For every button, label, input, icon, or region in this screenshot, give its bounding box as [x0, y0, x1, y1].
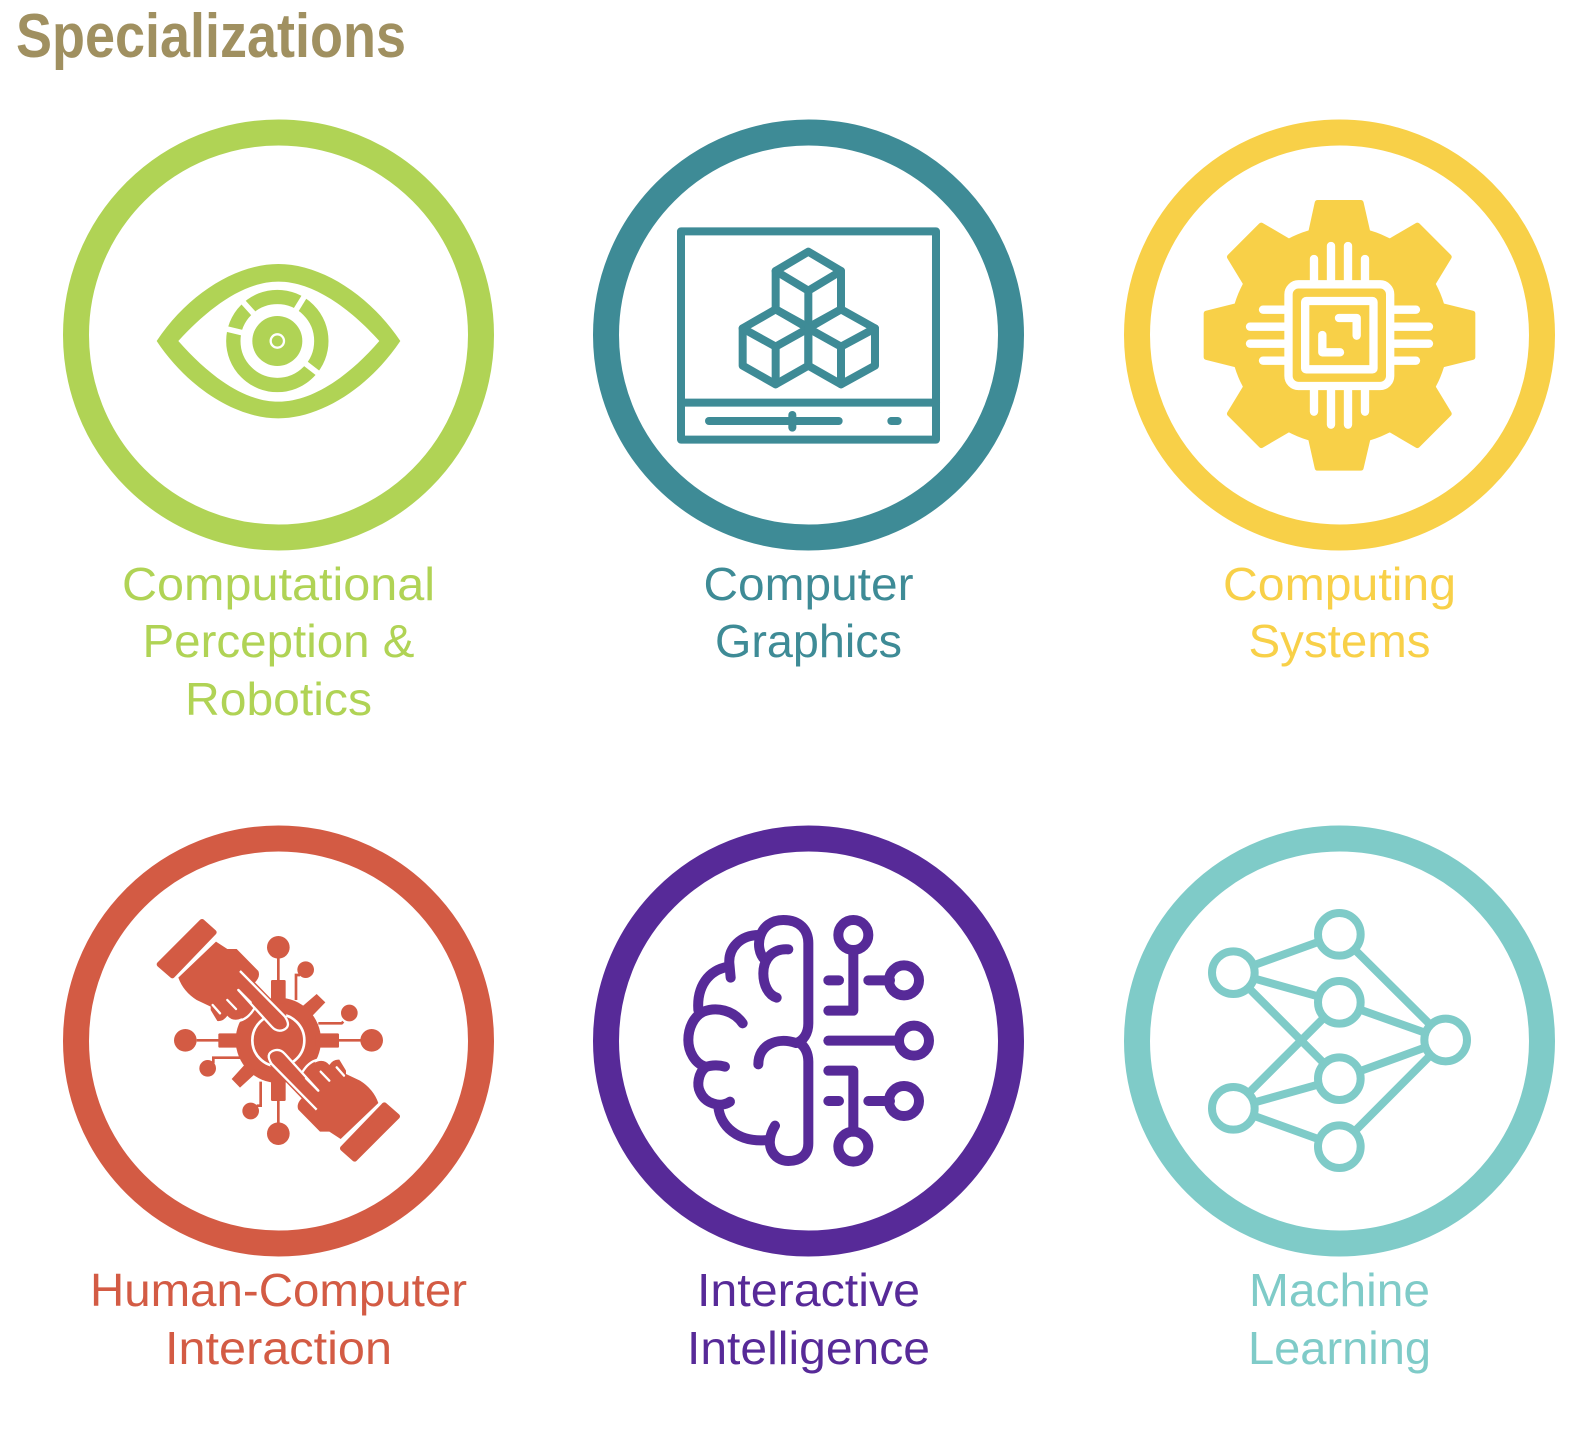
- panel: machine learning: [1137, 838, 1542, 1374]
- icon: gear with chip: [1207, 203, 1472, 468]
- label: [1248, 1264, 1431, 1374]
- label: Interactive: [697, 1264, 920, 1316]
- panel: computing systems: [1137, 132, 1542, 667]
- label: [122, 558, 435, 725]
- icon: hands and gear: [159, 922, 397, 1159]
- label: Learning: [1248, 1322, 1431, 1374]
- label: Computing: [1223, 558, 1456, 610]
- icon: monitor with cubes: [681, 231, 936, 440]
- ring: [76, 838, 481, 1244]
- ring: [606, 132, 1011, 538]
- label: Perception &: [142, 615, 414, 667]
- panel: computer graphics: [606, 132, 1011, 667]
- ring: [1137, 132, 1542, 538]
- title: Specializations: [16, 2, 406, 71]
- panel: computational perception and robotics: [76, 132, 481, 725]
- label: Human-Computer: [90, 1264, 467, 1316]
- label: [704, 558, 914, 667]
- icon: eye: [157, 264, 400, 418]
- label: Computer: [704, 558, 914, 610]
- label: Graphics: [715, 615, 902, 667]
- panel: human-computer interaction: [76, 838, 481, 1374]
- panel: interactive intelligence: [606, 838, 1011, 1374]
- label: Machine: [1249, 1264, 1430, 1316]
- label: [90, 1264, 467, 1374]
- icon: neural network: [1212, 913, 1467, 1168]
- icon: brain and circuit: [688, 920, 929, 1162]
- label: Interaction: [165, 1322, 392, 1374]
- label: Intelligence: [687, 1322, 930, 1374]
- label: [687, 1264, 930, 1374]
- label: Robotics: [185, 673, 372, 725]
- ring: [76, 132, 481, 538]
- label: [1223, 558, 1456, 667]
- label: Systems: [1248, 615, 1430, 667]
- label: Computational: [122, 558, 435, 610]
- ring: [606, 838, 1011, 1244]
- ring: [1137, 838, 1542, 1244]
